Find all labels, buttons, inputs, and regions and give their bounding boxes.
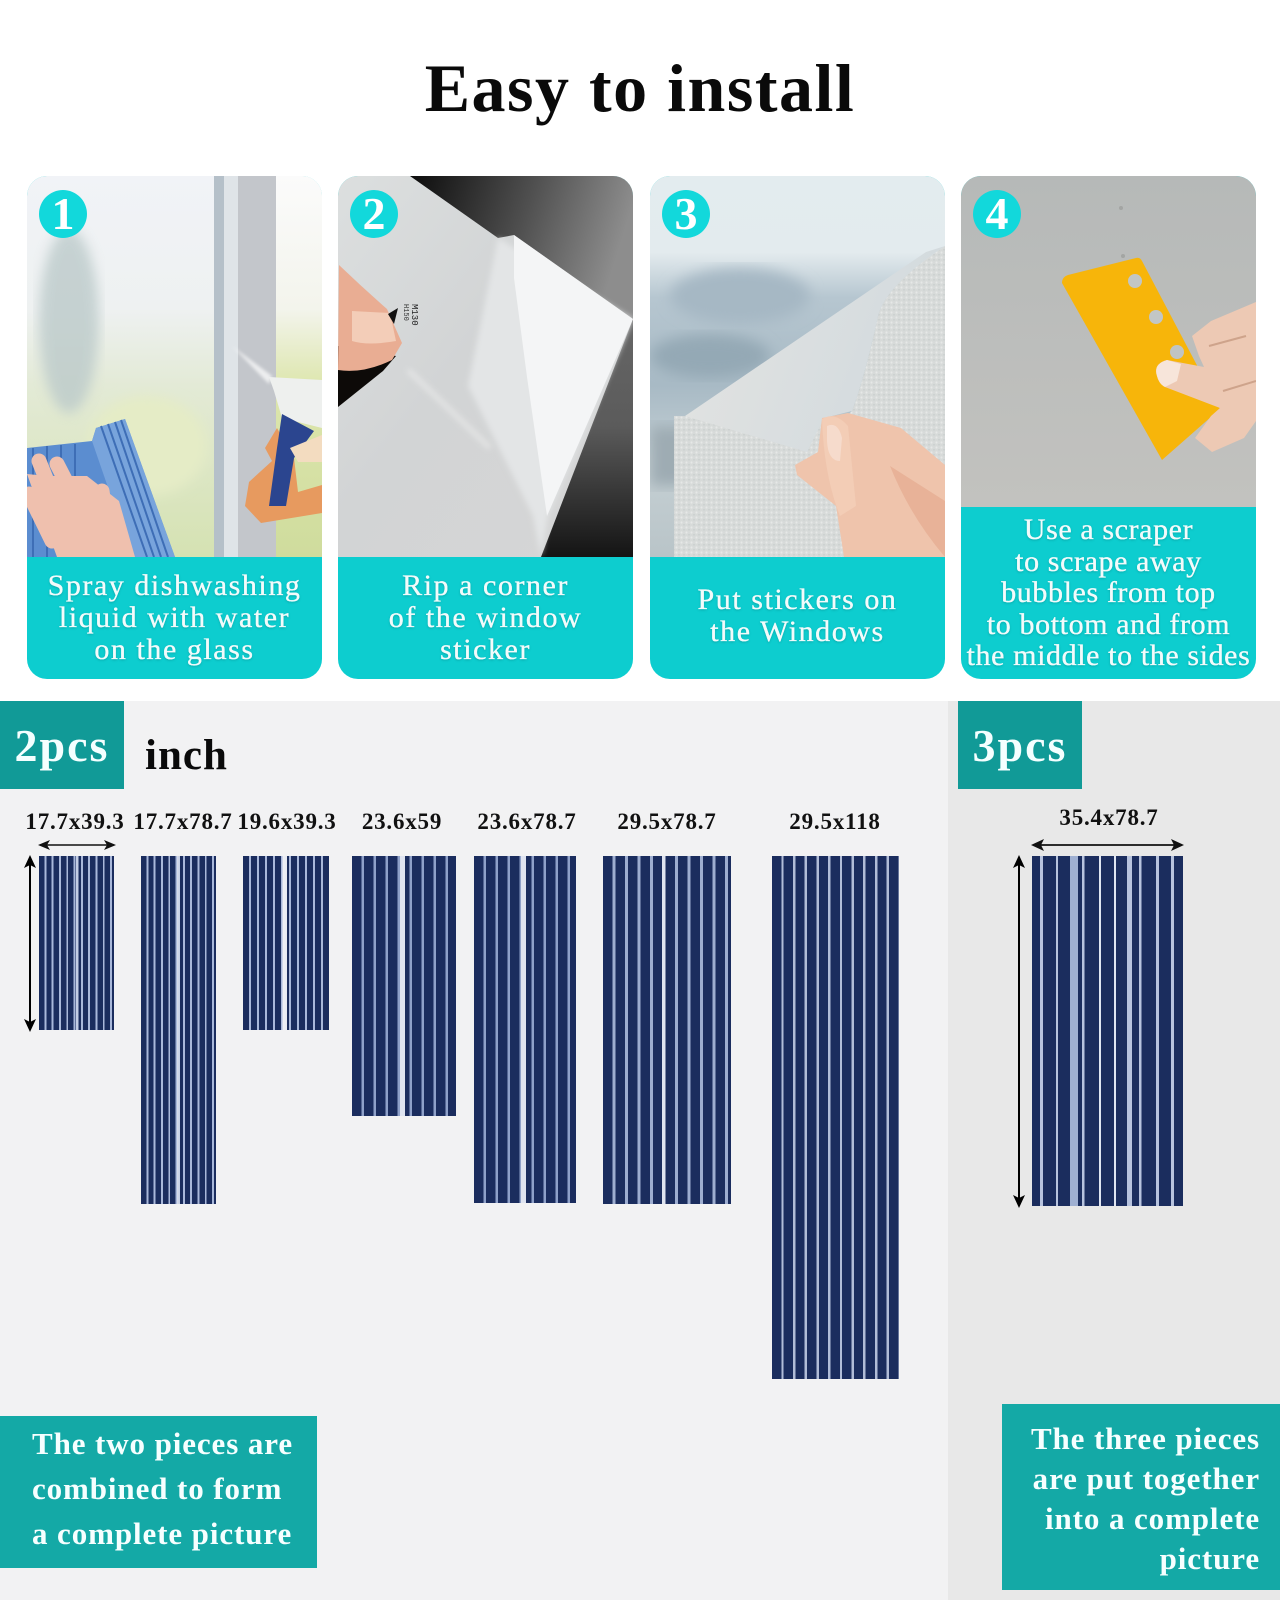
photo: ripping the corner bbox=[338, 176, 633, 557]
step number 3: 3 bbox=[674, 188, 698, 239]
caption: step 2: Rip a corner bbox=[402, 569, 569, 602]
panel: 2pcs sizes bbox=[0, 701, 948, 1600]
step number 3 bbox=[662, 190, 710, 238]
caption: step 3 bbox=[698, 583, 897, 648]
caption: step 1 bbox=[48, 569, 301, 668]
panel: step 2 bbox=[338, 176, 633, 679]
panel: step 1 bbox=[27, 176, 322, 679]
panel: 3pcs sizes bbox=[948, 701, 1280, 1600]
step number 1 bbox=[39, 190, 87, 238]
step number 4 bbox=[973, 190, 1021, 238]
caption: step 4: to scrape away bbox=[1015, 545, 1202, 578]
caption: step 1: Spray dishwashing bbox=[48, 569, 301, 602]
caption: step 1: liquid with water bbox=[59, 601, 290, 634]
step number 2: 2 bbox=[362, 188, 386, 239]
size label: 17.7x78.7 bbox=[133, 809, 233, 834]
caption: step 3: the Windows bbox=[710, 615, 885, 648]
caption: step 4: bubbles from top bbox=[1001, 576, 1216, 609]
photo: scraping bubbles bbox=[961, 176, 1256, 507]
badge: 2pcs: 2pcs bbox=[15, 720, 109, 771]
blue cloth bbox=[27, 419, 175, 557]
caption: step 4: to bottom and from bbox=[987, 608, 1230, 641]
callout: three pieces: picture bbox=[1160, 1541, 1260, 1576]
caption: step 4 bbox=[966, 513, 1250, 672]
unit label: inch: inch bbox=[145, 732, 228, 779]
callout: three pieces bbox=[1002, 1404, 1280, 1590]
strip: 17.7x78.7 bbox=[141, 856, 216, 1204]
callout: two pieces: combined to form bbox=[32, 1471, 282, 1506]
strip: 23.6x59 bbox=[352, 856, 456, 1116]
panel: step 4 bbox=[961, 176, 1256, 679]
callout: two pieces: The two pieces are bbox=[32, 1426, 293, 1461]
arrow: width 17.7 bbox=[38, 840, 116, 850]
strip: 35.4x78.7 bbox=[1032, 856, 1183, 1206]
strip: 17.7x39.3 bbox=[39, 856, 114, 1030]
caption: step 2: of the window bbox=[389, 601, 582, 634]
strip: 19.6x39.3 bbox=[243, 856, 329, 1030]
arrow: height 39.3 bbox=[24, 855, 36, 1032]
caption: step 3: Put stickers on bbox=[698, 583, 897, 616]
step number 2 bbox=[350, 190, 398, 238]
spray bottle and hand bbox=[269, 377, 322, 428]
photo: spraying the glass bbox=[27, 176, 322, 557]
panel: step 3 bbox=[650, 176, 945, 679]
strip: 29.5x78.7 bbox=[603, 856, 731, 1204]
callout: two pieces: a complete picture bbox=[32, 1516, 292, 1551]
callout: three pieces: The three pieces bbox=[1031, 1421, 1260, 1456]
size label: 23.6x78.7 bbox=[477, 809, 577, 834]
badge: 3pcs bbox=[958, 701, 1082, 789]
arrow: width 35.4 bbox=[1031, 839, 1184, 851]
photo: putting sticker on window bbox=[650, 176, 945, 557]
caption: step 4: Use a scraper bbox=[1024, 513, 1193, 546]
callout: three pieces: are put together bbox=[1033, 1461, 1260, 1496]
photo: ripping the corner: H150 bbox=[401, 304, 409, 321]
size label: 17.7x39.3 bbox=[25, 809, 125, 834]
step number 4: 4 bbox=[986, 188, 1008, 239]
arrow: height 78.7 bbox=[1013, 855, 1025, 1208]
hand bbox=[27, 474, 135, 557]
strip: 29.5x118 bbox=[772, 856, 899, 1379]
size label: 29.5x118 bbox=[789, 809, 881, 834]
caption: step 2 bbox=[389, 569, 582, 666]
size label: 35.4x78.7 bbox=[1059, 805, 1159, 830]
step number 1: 1 bbox=[52, 188, 74, 239]
callout: three pieces: into a complete bbox=[1045, 1501, 1260, 1536]
size label: 29.5x78.7 bbox=[617, 809, 717, 834]
size label: 19.6x39.3 bbox=[237, 809, 337, 834]
callout: two pieces bbox=[0, 1416, 317, 1568]
badge: 2pcs bbox=[0, 701, 124, 789]
caption: step 4: the middle to the sides bbox=[967, 639, 1250, 672]
strip: 23.6x78.7 bbox=[474, 856, 576, 1203]
size label: 23.6x59 bbox=[362, 809, 442, 834]
caption: step 1: on the glass bbox=[94, 633, 255, 666]
title: Easy to install bbox=[425, 50, 855, 126]
photo: ripping the corner: M130 bbox=[409, 304, 419, 326]
badge: 3pcs: 3pcs bbox=[973, 720, 1067, 771]
caption: step 2: sticker bbox=[440, 633, 531, 666]
